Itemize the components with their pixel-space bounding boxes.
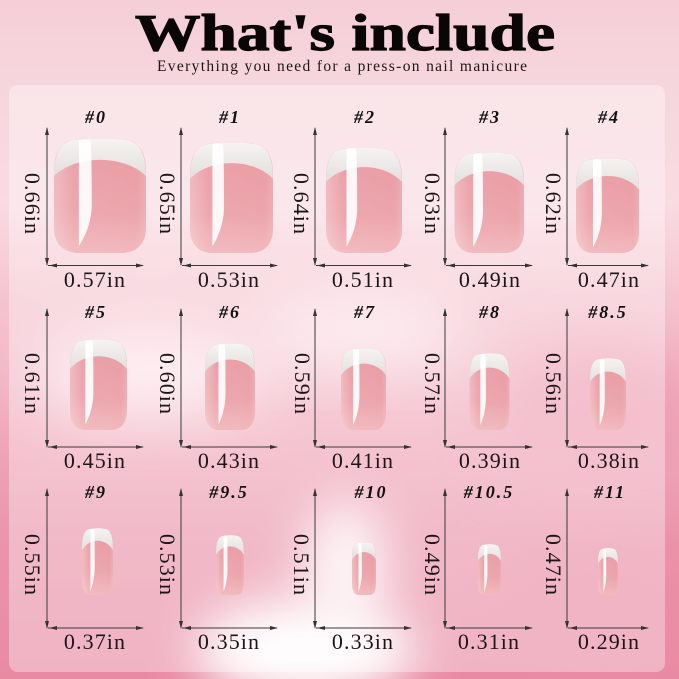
height 0.64in: 0.64in xyxy=(289,173,314,235)
width 0.57in: 0.57in xyxy=(64,267,126,292)
nail #10.5 xyxy=(478,544,501,595)
width 0.37in: 0.37in xyxy=(64,629,126,654)
size #9 xyxy=(20,482,144,654)
height 0.53in: 0.53in xyxy=(155,534,180,596)
arrows #8 xyxy=(443,308,533,449)
size #10 xyxy=(289,482,412,654)
nail #8.5 xyxy=(590,358,626,430)
nail #10 xyxy=(352,542,376,595)
width 0.31in: 0.31in xyxy=(458,629,520,654)
arrows #1 xyxy=(179,127,278,268)
size #8.5 xyxy=(541,302,649,473)
arrows #11 xyxy=(565,488,649,630)
size #3 xyxy=(420,107,533,292)
arrows #9 xyxy=(45,488,144,630)
label #3: #3 xyxy=(478,107,501,127)
arrows #0 xyxy=(45,127,144,268)
height 0.65in: 0.65in xyxy=(155,173,180,235)
height 0.47in: 0.47in xyxy=(541,534,566,596)
nail #9 xyxy=(82,528,113,595)
nail #11 xyxy=(598,548,618,595)
height 0.66in: 0.66in xyxy=(20,173,45,235)
label #0: #0 xyxy=(84,107,107,127)
width 0.29in: 0.29in xyxy=(578,629,640,654)
size #11 xyxy=(541,482,649,654)
size #5 xyxy=(20,302,144,473)
label #9: #9 xyxy=(84,482,107,502)
height 0.57in: 0.57in xyxy=(420,353,445,415)
size #0 xyxy=(20,107,146,292)
height 0.59in: 0.59in xyxy=(290,353,315,415)
nail #0 xyxy=(54,138,146,253)
label #8.5: #8.5 xyxy=(587,302,628,322)
nail #8 xyxy=(470,353,510,430)
arrows #4 xyxy=(565,127,649,268)
arrows #6 xyxy=(179,308,278,449)
label #10: #10 xyxy=(354,482,388,502)
height 0.60in: 0.60in xyxy=(155,353,180,415)
height 0.55in: 0.55in xyxy=(20,534,45,596)
width 0.43in: 0.43in xyxy=(198,448,260,473)
size #9.5 xyxy=(155,482,278,654)
arrows #7 xyxy=(313,308,412,449)
width 0.51in: 0.51in xyxy=(332,267,394,292)
width 0.39in: 0.39in xyxy=(459,448,521,473)
label #5: #5 xyxy=(84,302,107,322)
height 0.63in: 0.63in xyxy=(420,173,445,235)
size #7 xyxy=(290,302,412,473)
size #1 xyxy=(155,107,278,292)
nail #1 xyxy=(190,142,273,253)
label #4: #4 xyxy=(597,107,620,127)
nail #4 xyxy=(576,158,639,253)
height 0.62in: 0.62in xyxy=(541,173,566,235)
width 0.53in: 0.53in xyxy=(198,267,260,292)
size #2 xyxy=(289,107,412,292)
label #10.5: #10.5 xyxy=(463,482,514,502)
width 0.41in: 0.41in xyxy=(332,448,394,473)
nail #5 xyxy=(70,339,127,430)
nail #9.5 xyxy=(216,535,244,595)
nail #7 xyxy=(341,348,386,430)
title: What's include xyxy=(135,5,555,62)
height 0.49in: 0.49in xyxy=(420,534,445,596)
size #8 xyxy=(420,302,533,473)
label #7: #7 xyxy=(353,302,376,322)
arrows #3 xyxy=(443,127,533,268)
arrows #5 xyxy=(45,308,144,449)
height 0.51in: 0.51in xyxy=(289,534,314,596)
label #8: #8 xyxy=(478,302,501,322)
subtitle: Everything you need for a press-on nail manicure xyxy=(157,58,527,75)
width 0.49in: 0.49in xyxy=(459,267,521,292)
label #2: #2 xyxy=(353,107,376,127)
label #9.5: #9.5 xyxy=(208,482,249,502)
nail #3 xyxy=(454,152,524,253)
label #11: #11 xyxy=(593,482,626,502)
label #6: #6 xyxy=(218,302,241,322)
height 0.56in: 0.56in xyxy=(541,353,566,415)
height 0.61in: 0.61in xyxy=(20,353,45,415)
width 0.47in: 0.47in xyxy=(578,267,640,292)
size #10.5 xyxy=(420,482,533,654)
arrows #10 xyxy=(313,488,412,630)
arrows #2 xyxy=(313,127,412,268)
width 0.33in: 0.33in xyxy=(332,629,394,654)
arrows #10.5 xyxy=(443,488,533,630)
nail #2 xyxy=(326,147,402,253)
arrows #8.5 xyxy=(565,308,649,449)
label #1: #1 xyxy=(218,107,241,127)
width 0.35in: 0.35in xyxy=(198,629,260,654)
width 0.38in: 0.38in xyxy=(578,448,640,473)
arrows #9.5 xyxy=(179,488,278,630)
width 0.45in: 0.45in xyxy=(64,448,126,473)
size #4 xyxy=(541,107,649,292)
nail #6 xyxy=(205,343,255,430)
size #6 xyxy=(155,302,278,473)
